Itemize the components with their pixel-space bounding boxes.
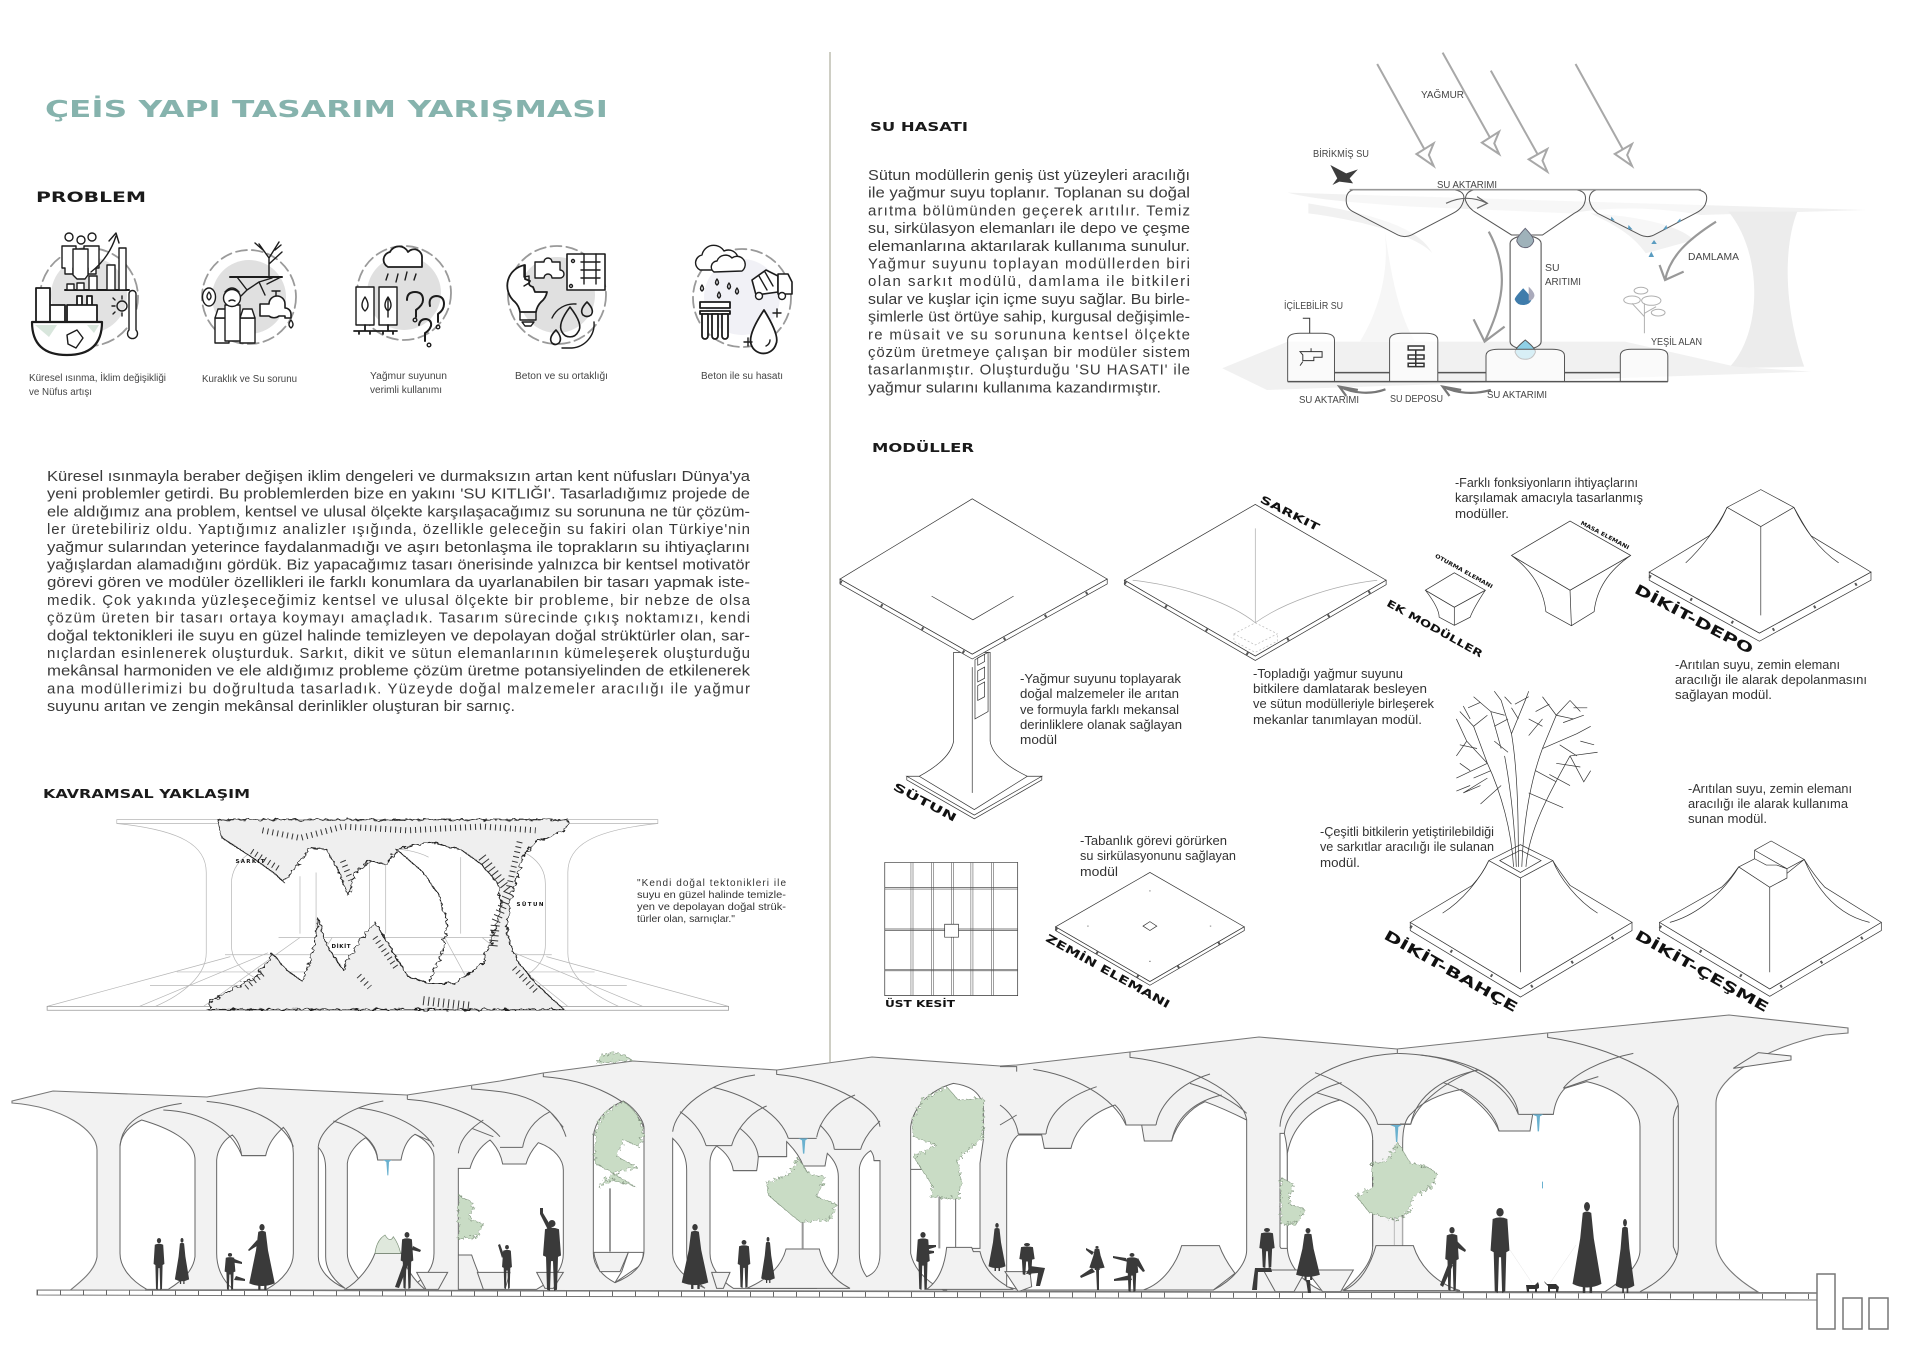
text block: water harvest: tasarlanmıştır. Oluşturduğu 'SU HASATI' ile: [868, 362, 1190, 379]
sapling: [1624, 287, 1665, 333]
diagram: water harvest: [1222, 53, 1866, 396]
text block: water harvest: arıtma bölümünden geçerek arıtılır. Temiz: [868, 202, 1190, 219]
ribs: [458, 1070, 956, 1248]
arch openings: [120, 1120, 434, 1289]
icon: drought and water problem: [202, 242, 296, 344]
labels: cave: [236, 859, 544, 950]
text block: water harvest: elemanlarına aktarılarak kullanıma sunulur.: [868, 238, 1190, 255]
caption: drought: Kuraklık ve Su sorunu: [202, 374, 297, 385]
rotated labels: OTURMA ELEMANI: [1434, 553, 1493, 590]
text: dikit çeşme: -Arıtılan suyu, zemin elemanı: [1688, 782, 1852, 796]
dogs: [1510, 1245, 1576, 1292]
flow arrows: [1339, 197, 1716, 396]
water drip: [383, 1138, 808, 1175]
floor plate: [47, 1006, 729, 1010]
text block: problem description: suyunu arıtan ve zengin mekânsal derinlikler oluşturan bir sarnıç.: [47, 698, 515, 715]
icon: rain harvesting with concrete: [693, 245, 792, 353]
scale bars: [1817, 1274, 1888, 1329]
text: dikit bahçe: -Çeşitli bitkilerin yetiştirilebildiği: [1320, 825, 1494, 839]
module: dikit çeşme: [1660, 841, 1881, 996]
planter and table: [345, 1253, 448, 1289]
labels: water diagram: SU: [1545, 262, 1560, 274]
text: zemin: su sirkülasyonunu sağlayan: [1080, 849, 1236, 863]
text: ek modüller: -Farklı fonksiyonların ihtiyaçlarını: [1455, 476, 1638, 490]
caption: rainwater: Yağmur suyunun: [370, 371, 447, 382]
text: sarkıt: mekanlar tanımlayan modül.: [1253, 713, 1422, 727]
caption: partnership: Beton ve su ortaklığı: [515, 371, 608, 382]
planters and tables: [458, 1247, 1013, 1289]
text: sarkıt: [1253, 667, 1435, 727]
back roof wing: [1733, 1053, 1791, 1068]
text: sarkıt: bitkilere damlatarak besleyen: [1253, 682, 1427, 696]
text block: problem description: yağmur sularından yeterince faydalanmadığı ve aşırı betonlaşma ile toprakların su ihtiyaçlarını: [47, 539, 750, 556]
labels: water diagram: YAĞMUR: [1421, 88, 1464, 101]
text block: water harvest: çözüm üretmeye çalışan bir modüler sistem: [868, 344, 1190, 361]
water drops: [1515, 217, 1681, 359]
text: dikit bahçe: [1320, 825, 1494, 870]
text: dikit depo: -Arıtılan suyu, zemin elemanı: [1675, 658, 1840, 672]
arch opening: [1403, 1082, 1640, 1292]
text: ek modüller: modüller.: [1455, 507, 1509, 521]
rotated labels: [885, 494, 1772, 1016]
chart: conceptual cave drawing: [47, 820, 729, 1010]
text: ek modüller: [1455, 476, 1643, 521]
module: dikit bahçe: [1410, 845, 1632, 997]
module descriptions: [1020, 476, 1867, 879]
heading: conceptual approach: KAVRAMSAL YAKLAŞIM: [43, 786, 250, 801]
rotated labels: ZEMİN ELEMANI: [1043, 931, 1173, 1011]
people silhouettes: [154, 1202, 1634, 1293]
text: sütun: [1020, 672, 1182, 747]
section: arcade part three: [1000, 1049, 1500, 1292]
text: sütun: derinliklere olanak sağlayan: [1020, 718, 1182, 732]
panel: modules drawings: [840, 490, 1881, 997]
labels: water diagram: İÇİLEBİLİR SU: [1284, 299, 1343, 312]
text block: water harvest: olan sarkıt modülü, damlama ile bitkileri: [868, 273, 1190, 290]
rotated labels: ÜST KESİT: [885, 999, 956, 1010]
section: arcade part one: [120, 1086, 500, 1289]
labels: cave: SÜTUN: [516, 901, 544, 908]
text: dikit çeşme: [1688, 782, 1852, 826]
text block: problem description: yağışlardan alamadığını gördük. Biz yapacağımız tasarı önerisinde yalnızca bir kentsel motivatör: [47, 556, 750, 574]
text: dikit bahçe: modül.: [1320, 856, 1360, 870]
rotated labels: SARKIT: [1258, 494, 1322, 535]
heading: modules: MODÜLLER: [872, 440, 974, 455]
arch openings: [1007, 1100, 1373, 1290]
rotated labels: EK MODÜLLER: [1384, 596, 1486, 660]
labels: water diagram: [1284, 88, 1739, 406]
icon: bird: [1330, 165, 1358, 185]
text block: problem description: Küresel ısınmayla beraber değişen iklim dengeleri ve durmaksızın artan kent nüfusları Dünya'ya: [47, 468, 751, 485]
text: sütun: ve formuyla farklı mekansal: [1020, 703, 1179, 717]
icon: efficient rainwater use: [354, 246, 451, 347]
text block: problem description: doğal tektonikleri ile suyu en güzel halinde temizleyen ve depolayan doğal strüktürler olan, sar-: [47, 627, 750, 644]
water drip: [1532, 1114, 1543, 1188]
text block: water harvest: sular ve kuşlar için içme suyu sağlar. Bu birle-: [868, 291, 1190, 308]
rotated labels: SÜTUN: [891, 779, 959, 825]
ribs: [1000, 1049, 1500, 1247]
text block: problem description: nıçlardan esinlenerek oluşturduk. Sarkıt, dikit ve sütun elemanlarının kümeleşerek oluşturduğu: [47, 645, 750, 662]
text block: water harvest: re müsait ve su sorununa kentsel ölçekte: [868, 326, 1190, 343]
module: sarkıt: [1124, 504, 1386, 660]
ghost structure: [1222, 193, 1866, 390]
vertical divider: [829, 52, 831, 1062]
üst kesit plan: [885, 862, 1018, 996]
cave body: [208, 820, 568, 1009]
quote text: [637, 878, 786, 925]
labels: water diagram: SU AKTARIMI: [1437, 179, 1497, 191]
section: arcade mass and roof: [12, 1015, 1848, 1292]
text block: problem description: çözüm üreten bir tasarı ortaya koymayı amaçladık. Tasarım sürecinde çıkış noktamızı, kendi: [47, 610, 750, 627]
heading: problem: PROBLEM: [36, 190, 146, 206]
text block: problem description: yeni problemler getirdi. Bu problemlerden bize en yakını 'SU KITLIĞI'. Tasarladığımız projede de: [47, 486, 750, 503]
section: arcade part four: [1400, 1033, 1791, 1292]
section: arcade part two: [375, 1053, 1013, 1290]
heading: water harvest: SU HASATI: [870, 120, 968, 134]
caption: warming: Küresel ısınma, İklim değişikliği: [29, 371, 166, 384]
text: zemin: modül: [1080, 865, 1118, 879]
text block: problem description: medik. Çok yakında yüzleşeceğimiz kentsel ve ulusal ölçekte bir probleme, bir nebze de olsa: [47, 592, 751, 609]
purification column: [1510, 236, 1541, 349]
text block: water harvest: yağmur sularını kullanıma kazandırmıştır.: [868, 379, 1161, 396]
text block: problem description: görevi gören ve modüler özellikleri ile farklı konumlara da uyarlanabilen bir tasarı yapmak iste-: [47, 574, 750, 591]
ribs: [120, 1086, 500, 1160]
caption: rainwater: [370, 371, 447, 396]
rotated labels: DİKİT-DEPO: [1632, 581, 1756, 658]
text block: problem description: [47, 468, 751, 715]
ground modules: [1288, 333, 1668, 382]
labels: water diagram: YEŞİL ALAN: [1651, 335, 1702, 348]
collector funnels: [1346, 190, 1707, 237]
text block: water harvest: şimlerle üst örtüye sahip, kurgusal değişimle-: [868, 309, 1190, 326]
rotated labels: DİKİT-BAHÇE: [1381, 927, 1521, 1016]
labels: cave: SARKIT: [236, 859, 265, 865]
labels: water diagram: DAMLAMA: [1688, 251, 1739, 263]
module: sütun: [840, 499, 1107, 819]
module: masa elemanı: [1511, 521, 1631, 626]
text: zemin: -Tabanlık görevi görürken: [1080, 834, 1227, 848]
trunk column: [1394, 1217, 1402, 1245]
ribs: [1400, 1033, 1678, 1292]
rotated labels: DİKİT-ÇEŞME: [1632, 927, 1772, 1016]
text: sarkıt: -Topladığı yağmur suyunu: [1253, 667, 1403, 681]
text block: water harvest: ile yağmur suyu toplanır. Toplanan su doğal: [868, 185, 1190, 202]
text: dikit çeşme: sunan modül.: [1688, 812, 1767, 826]
title: ÇEİS YAPI TASARIM YARIŞMASI: [45, 95, 608, 123]
tap and filter icons: [1300, 318, 1424, 367]
planters and benches: [1005, 1246, 1460, 1292]
icon: global warming and population: [32, 233, 138, 355]
labels: water diagram: ARITIMI: [1545, 276, 1581, 288]
text: dikit depo: aracılığı ile alarak depolanmasını: [1675, 673, 1867, 687]
cave hatching: [246, 827, 536, 1006]
text block: water harvest: Yağmur suyunu toplayan modüllerden biri: [868, 256, 1190, 272]
labels: water diagram: SU AKTARIMI: [1487, 389, 1547, 401]
tree in planter: [1456, 691, 1598, 867]
panel: problem icons: [29, 233, 792, 398]
text block: problem description: ana modüllerimizi bu doğrultuda tasarladık. Yüzeyde doğal malzemeler aracılığı ile yağmur: [47, 680, 750, 697]
labels: water diagram: SU AKTARIMI: [1299, 394, 1359, 406]
text: sütun: -Yağmur suyunu toplayarak: [1020, 672, 1182, 686]
text: zemin: [1080, 834, 1236, 879]
text: sarkıt: ve sütun modülleriyle birleşerek: [1253, 697, 1435, 711]
quote text: suyu en güzel halinde temizle-: [637, 890, 786, 901]
text block: problem description: ler üretebiliriz oldu. Yaptığımız analizler ışığında, özellikle geleceğin su fakiri olan Türkiye'nin: [47, 521, 750, 538]
text: ek modüller: karşılamak amacıyla tasarlanmış: [1455, 491, 1643, 505]
text block: water harvest: [868, 167, 1190, 396]
rain arrows: [1377, 53, 1632, 172]
text: sütun: doğal malzemeler ile arıtan: [1020, 687, 1179, 701]
module: zemin: [1056, 872, 1244, 985]
quote text: yen ve depolayan doğal strük-: [637, 902, 786, 913]
rotated labels: MASA ELEMANI: [1579, 521, 1630, 551]
hall background lines: [47, 820, 729, 1006]
text: dikit depo: sağlayan modül.: [1675, 688, 1772, 702]
floor strip: [37, 1290, 1817, 1300]
caption: harvest: Beton ile su hasatı: [701, 371, 783, 382]
text: dikit çeşme: aracılığı ile alarak kullanıma: [1688, 797, 1848, 811]
arch openings: [458, 1083, 983, 1290]
text: dikit depo: [1675, 658, 1867, 702]
caption: warming: [29, 371, 166, 398]
caption: warming: ve Nüfus artışı: [29, 387, 92, 398]
text: sütun: modül: [1020, 733, 1057, 747]
icon: concrete and water partnership: [507, 246, 606, 348]
text block: water harvest: Sütun modüllerin geniş üst yüzeyleri aracılığı: [868, 167, 1190, 184]
labels: cave: DİKİT: [332, 943, 351, 950]
labels: water diagram: SU DEPOSU: [1390, 393, 1443, 405]
text block: problem description: ele aldığımız ana problem, kentsel ve ulusal ölçekte karşılaşacağımız su sorununa ne tür çözüm-: [47, 503, 750, 520]
quote text: türler olan, sarnıçlar.": [637, 914, 735, 925]
text: dikit bahçe: ve sarkıtlar aracılığı ile sulanan: [1320, 840, 1494, 854]
caption: rainwater: verimli kullanımı: [370, 385, 442, 396]
labels: water diagram: BİRİKMİŞ SU: [1313, 147, 1369, 160]
module: dikit depo: [1649, 490, 1871, 641]
trees: [1281, 1143, 1437, 1224]
module: oturma elemanı: [1425, 573, 1485, 625]
water drip: [1390, 1125, 1402, 1142]
quote text: "Kendi doğal tektonikleri ile: [637, 878, 786, 889]
text block: problem description: mekânsal harmoniden ve ele aldığımız probleme çözüm üretme potansiyelinden de etkilenerek: [47, 663, 751, 680]
text block: water harvest: su, sirkülasyon elemanları ile depo ve çeşme: [868, 220, 1190, 237]
trees: [375, 1053, 983, 1253]
